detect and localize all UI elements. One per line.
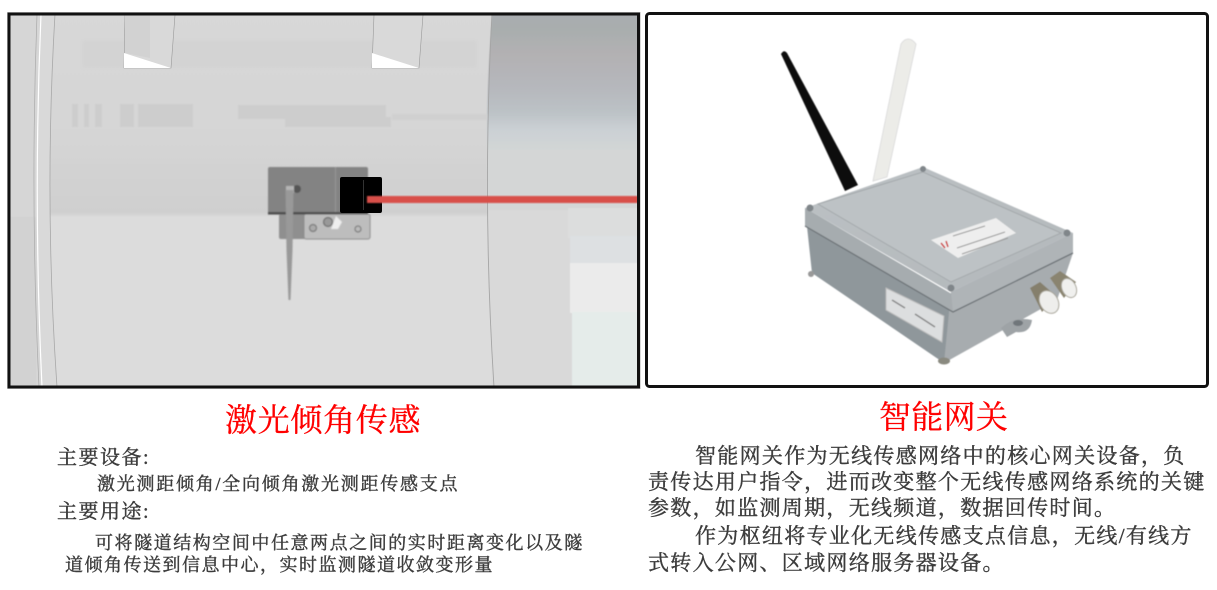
top label bbox=[931, 218, 1016, 258]
laser beam bbox=[367, 196, 638, 203]
enclosure lid bbox=[805, 167, 1073, 292]
text block: gateway description bbox=[648, 444, 1206, 575]
white antenna bbox=[873, 39, 916, 181]
equipment text: 激光测距倾角/全向倾角激光测距传感支点 bbox=[97, 474, 459, 494]
panel: smart gateway photo bbox=[645, 12, 1209, 388]
paragraph one bbox=[648, 444, 1206, 520]
paragraph one: 责传达用户指令，进而改变整个无线传感网络系统的关键 bbox=[648, 470, 1206, 494]
left enclosure face bbox=[805, 208, 955, 363]
right enclosure face bbox=[944, 233, 1073, 363]
black antenna bbox=[781, 51, 858, 191]
paragraph one: 智能网关作为无线传感网络中的核心网关设备，负 bbox=[695, 444, 1186, 468]
gateway device bbox=[781, 39, 1080, 364]
tunnel wall background bbox=[10, 12, 638, 389]
screws bbox=[806, 204, 814, 212]
text block: laser sensor description bbox=[57, 446, 584, 575]
paragraph two: 式转入公网、区域网络服务器设备。 bbox=[648, 551, 1005, 575]
blurred wall markings bbox=[72, 104, 487, 127]
heading: smart gateway: 智能网关 bbox=[879, 399, 1008, 435]
label: main use: 主要用途: bbox=[57, 501, 150, 523]
use text line one: 可将隧道结构空间中任意两点之间的实时距离变化以及隧 bbox=[95, 533, 584, 553]
tab bbox=[1001, 319, 1032, 337]
heading: laser tilt sensor: 激光倾角传感 bbox=[225, 402, 421, 438]
paragraph one: 参数，如监测周期，无线频道，数据回传时间。 bbox=[648, 496, 1116, 520]
paragraph two: 作为枢纽将专业化无线传感支点信息，无线/有线方 bbox=[695, 524, 1193, 548]
panel: laser tilt sensor scene bbox=[7, 12, 641, 389]
use text line two: 道倾角传送到信息中心，实时监测隧道收敛变形量 bbox=[65, 555, 494, 575]
paragraph two bbox=[648, 524, 1193, 575]
cable glands bbox=[1030, 282, 1056, 312]
panel border bbox=[9, 14, 638, 387]
tunnel wall openings bbox=[124, 15, 423, 68]
laser sensor device bbox=[268, 167, 382, 300]
side label bbox=[886, 288, 944, 342]
label: main equipment: 主要设备: bbox=[57, 447, 150, 469]
